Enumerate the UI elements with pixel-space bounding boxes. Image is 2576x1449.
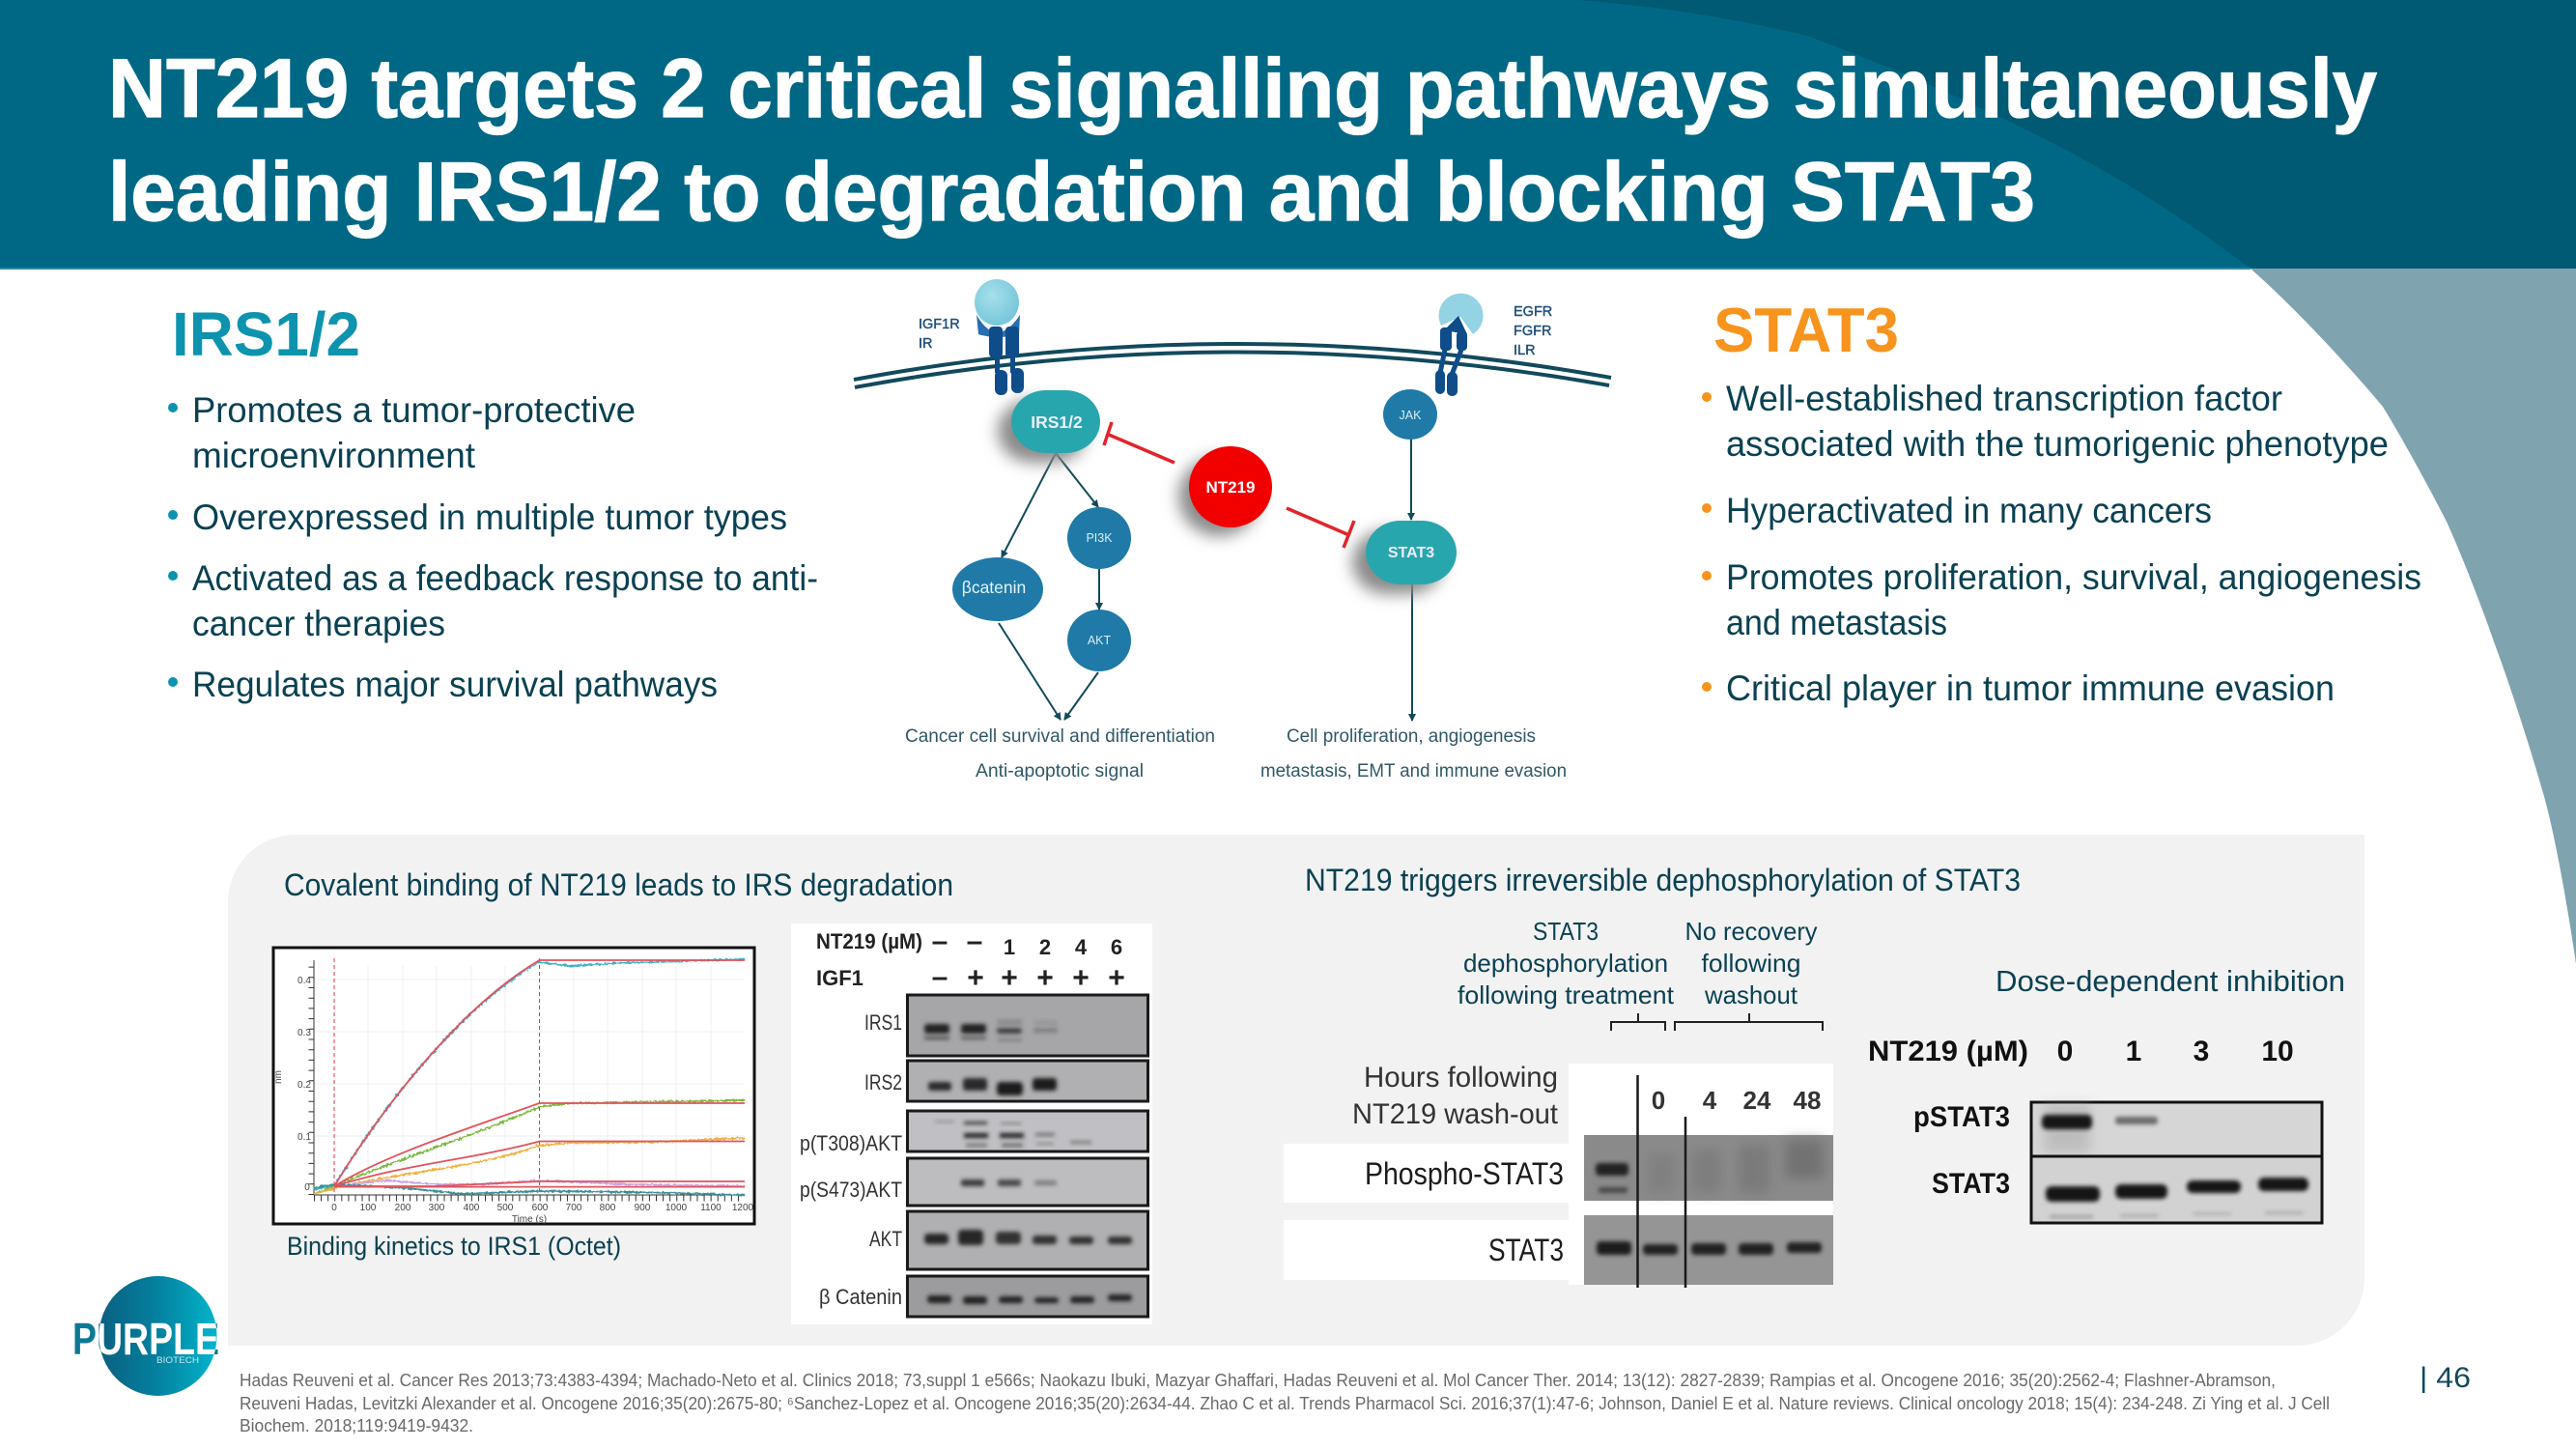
blot labels: p(T308)AKT: [800, 1131, 902, 1155]
blot header row: [816, 925, 1125, 994]
blot header row: +: [1108, 962, 1125, 994]
node: IRS1/2: [998, 390, 1100, 463]
hour values: [1652, 1086, 1821, 1115]
lane dividers: [1638, 1075, 1685, 1288]
logo: Purple Biotech: PURPLE: [72, 1314, 219, 1364]
blot: beta catenin: [908, 1276, 1147, 1317]
node: STAT3: [1352, 521, 1457, 594]
references: Biochem. 2018;119:9419-9432.: [240, 1415, 473, 1435]
axis labels: 0: [331, 1203, 337, 1213]
hour values: 4: [1703, 1086, 1717, 1115]
axis labels: 0.4: [297, 976, 311, 986]
axis labels: 300: [429, 1203, 445, 1213]
references: Reuveni Hadas, Levitzki Alexander et al. Oncogene 2016;35(20):2675-80; ⁶Sanchez-Lopez et al. Oncogene 2016;35(20):2634-44. Zhao C et al. Trends Pharmacol Sci. 2016;37(1):47-6; Johnson, Daniel E et al. Nature reviews. Clinical oncology 2018; 15(4): 234-248. Zi Ying et al. J Cell: [240, 1393, 2330, 1413]
axis labels: 400: [464, 1203, 480, 1213]
label: IGF1R IR: [919, 317, 960, 352]
axis labels: Time (s): [512, 1214, 547, 1225]
blot header row: –: [967, 925, 982, 957]
annotation: no recovery: following: [1702, 949, 1800, 978]
blot header row: +: [1072, 962, 1090, 994]
outcome labels: Anti-apoptotic signal: [976, 761, 1144, 781]
axis labels: 0.1: [297, 1132, 311, 1143]
hour values: 0: [1652, 1086, 1665, 1115]
blot labels: STAT3: [1932, 1168, 2010, 1200]
grid lines and axes: [314, 966, 745, 1195]
hours label: Hours following: [1364, 1062, 1558, 1094]
title: [108, 43, 2377, 239]
blot: phospho-STAT3: [1584, 1135, 1833, 1201]
label: EGFR FGFR ILR: FGFR: [1514, 324, 1551, 339]
header band: [0, 0, 2576, 270]
annotation: no recovery: [1684, 917, 1818, 1009]
panel: STAT3 text: [1702, 295, 2421, 708]
axis labels: 200: [395, 1203, 411, 1213]
data curves: [314, 959, 745, 1195]
outcome labels: metastasis, EMT and immune evasion: [1260, 761, 1567, 781]
blot labels: [1365, 1156, 1564, 1267]
blot header row: +: [967, 962, 984, 994]
heading: STAT3: STAT3: [1713, 295, 1899, 365]
logo: Purple Biotech: BIOTECH: [156, 1355, 199, 1365]
annotation: no recovery: No recovery: [1684, 917, 1818, 946]
bullet list: STAT3: and metastasis: [1726, 603, 1947, 642]
icon: EGFR receptor: [1435, 294, 1484, 396]
outcome labels: Cancer cell survival and differentiation: [905, 726, 1215, 747]
blot header row: +: [1036, 962, 1054, 994]
bullet list: STAT3: Promotes proliferation, survival, angiogenesis: [1726, 557, 2421, 597]
chart: binding kinetics: [273, 948, 754, 1225]
bullet list: STAT3: Critical player in tumor immune evasion: [1726, 668, 2335, 708]
node: AKT: AKT: [1088, 634, 1112, 647]
western blot: dose response: [1868, 1036, 2322, 1223]
axis labels: 100: [360, 1203, 377, 1213]
blot header row: +: [1001, 962, 1018, 994]
heading: dose-dependent inhibition: Dose-dependent inhibition: [1996, 964, 2345, 998]
axis labels: 600: [532, 1203, 549, 1213]
heading: IRS1/2: IRS1/2: [172, 299, 360, 369]
hours label: [1352, 1062, 1559, 1130]
node: AKT: [1067, 610, 1131, 671]
pathway diagram: [854, 279, 1611, 781]
axis labels: 1000: [665, 1203, 688, 1213]
annotation: no recovery: washout: [1704, 980, 1798, 1009]
outcome labels: [905, 726, 1567, 781]
western blot: wash-out: [1284, 1062, 1833, 1288]
axis labels: 700: [566, 1203, 582, 1213]
blot labels: [1913, 1101, 2010, 1200]
axis labels: 0: [304, 1182, 310, 1193]
hour values: 24: [1743, 1086, 1771, 1115]
node: IRS1/2: IRS1/2: [1031, 412, 1083, 432]
blot header row: 6: [1111, 935, 1122, 959]
brackets: [1611, 1013, 1823, 1031]
logo: Purple Biotech: PURPLE: [72, 1314, 219, 1364]
node: PI3K: PI3K: [1086, 531, 1113, 545]
axis labels: 800: [600, 1203, 616, 1213]
hour values: 48: [1794, 1086, 1821, 1115]
fit curves: [334, 960, 745, 1187]
annotation: STAT3 dephosphorylation: [1458, 917, 1675, 1009]
inhibition arrows: [1104, 422, 1354, 548]
blot labels: Phospho-STAT3: [1365, 1156, 1564, 1191]
label: EGFR FGFR ILR: [1514, 304, 1552, 358]
blot: p(S473)AKT: [908, 1158, 1147, 1206]
blot header row: –: [932, 961, 948, 993]
blot labels: STAT3: [1488, 1233, 1564, 1267]
axis labels: 1200: [732, 1203, 754, 1213]
axis labels: 500: [497, 1203, 514, 1213]
blot: IRS1: [908, 995, 1147, 1056]
node: NT219: [1178, 446, 1272, 536]
blot labels: AKT: [869, 1227, 902, 1251]
node: NT219: NT219: [1205, 478, 1256, 497]
blot: p(T308)AKT: [908, 1111, 1147, 1151]
blot labels: β Catenin: [819, 1285, 902, 1309]
hours label: NT219 wash-out: [1352, 1098, 1559, 1130]
blot labels: IRS2: [864, 1070, 902, 1094]
arrows: signalling: [999, 439, 1412, 721]
dose header: 0: [2057, 1036, 2073, 1067]
annotation: STAT3 dephosphorylation: STAT3: [1533, 917, 1599, 946]
annotation: STAT3 dephosphorylation: following treatment: [1458, 980, 1675, 1009]
node: beta catenin: βcatenin: [962, 578, 1026, 597]
dose header: 3: [2194, 1036, 2209, 1067]
node: STAT3: STAT3: [1388, 545, 1434, 561]
bullet list: IRS1/2: Promotes a tumor-protective: [192, 390, 636, 430]
node: JAK: [1383, 389, 1437, 440]
page number: | 46: [2420, 1362, 2471, 1394]
blot labels: IRS1: [864, 1010, 902, 1035]
label boxes: [1284, 1144, 1569, 1203]
blot labels: [800, 1010, 902, 1309]
icon: IGF1R receptor: [975, 279, 1024, 395]
blot: AKT: [908, 1211, 1147, 1269]
references: [240, 1370, 2330, 1435]
heading: covalent binding: Covalent binding of NT219 leads to IRS degradation: [284, 867, 953, 902]
title: leading IRS1/2 to degradation and blocking STAT3: [108, 146, 2035, 239]
heading: irreversible dephosphorylation: NT219 triggers irreversible dephosphorylation of STAT3: [1305, 863, 2021, 897]
blot header row: –: [932, 925, 948, 957]
label: IGF1R IR: IR: [919, 336, 933, 352]
bullet list: IRS1/2: Activated as a feedback response to anti-: [192, 558, 818, 598]
bullet list: STAT3: associated with the tumorigenic phenotype: [1726, 424, 2389, 464]
bullet list: STAT3: Hyperactivated in many cancers: [1726, 491, 2212, 530]
label: EGFR FGFR ILR: EGFR: [1514, 304, 1552, 320]
blot labels: pSTAT3: [1913, 1101, 2010, 1133]
blot header row: NT219 (µM): [816, 929, 922, 953]
axis labels: nm: [273, 1070, 284, 1084]
bullet list: IRS1/2: [168, 390, 818, 704]
node: JAK: JAK: [1400, 409, 1422, 422]
outcome labels: Cell proliferation, angiogenesis: [1287, 726, 1536, 747]
western blot: IRS degradation: [791, 923, 1152, 1324]
blot: IRS2: [908, 1061, 1147, 1101]
blot: pSTAT3: [2031, 1102, 2322, 1156]
title: NT219 targets 2 critical signalling pathways simultaneously: [108, 43, 2377, 135]
bullet list: IRS1/2: microenvironment: [192, 436, 476, 475]
panel: grey evidence: [228, 835, 2364, 1346]
bullet list: IRS1/2: Regulates major survival pathways: [192, 665, 718, 704]
axis labels: 0.2: [297, 1080, 311, 1091]
blot labels: p(S473)AKT: [800, 1178, 902, 1202]
panel: IRS1/2 text: [168, 299, 818, 704]
bullet list: IRS1/2: cancer therapies: [192, 604, 445, 643]
axis labels: [273, 976, 754, 1225]
background corner shape: [2250, 269, 2576, 963]
blot: STAT3 total: [2031, 1156, 2322, 1223]
caption: binding kinetics: Binding kinetics to IRS1 (Octet): [287, 1232, 621, 1261]
bullet list: STAT3: Well-established transcription factor: [1726, 379, 2282, 418]
bullet list: IRS1/2: Overexpressed in multiple tumor types: [192, 497, 787, 537]
bullet list: STAT3: [1702, 379, 2421, 708]
axis labels: 1100: [700, 1203, 722, 1213]
blot header row: 4: [1075, 935, 1088, 959]
label: EGFR FGFR ILR: ILR: [1514, 343, 1536, 358]
dose header: 10: [2261, 1036, 2294, 1067]
annotation: STAT3 dephosphorylation: dephosphorylation: [1463, 949, 1668, 978]
node: PI3K: [1067, 507, 1131, 569]
axis labels: 900: [635, 1203, 651, 1213]
references: Hadas Reuveni et al. Cancer Res 2013;73:4383-4394; Machado-Neto et al. Clinics 2018; 73,suppl 1 e566s; Naokazu Ibuki, Mazyar Ghaffari, Hadas Reuveni et al. Mol Cancer Ther. 2014; 13(12): 2827-2839; Rampias et al. Oncogene 2016; 35(20):2562-4; Flashner-Abramson,: [240, 1370, 2276, 1390]
node: beta catenin: [952, 557, 1043, 621]
blot header row: 1: [1004, 935, 1015, 959]
blot: STAT3: [1584, 1215, 1833, 1285]
axis labels: 0.3: [297, 1028, 311, 1038]
dose header: 1: [2126, 1036, 2141, 1067]
blot header row: IGF1: [816, 966, 863, 990]
dose header: [1868, 1036, 2294, 1067]
dose header: NT219 (µM): [1868, 1036, 2028, 1067]
logo: Purple Biotech: [72, 1276, 219, 1396]
blot header row: 2: [1039, 935, 1051, 959]
label: IGF1R IR: IGF1R: [919, 317, 960, 332]
cell membrane: [854, 344, 1611, 387]
